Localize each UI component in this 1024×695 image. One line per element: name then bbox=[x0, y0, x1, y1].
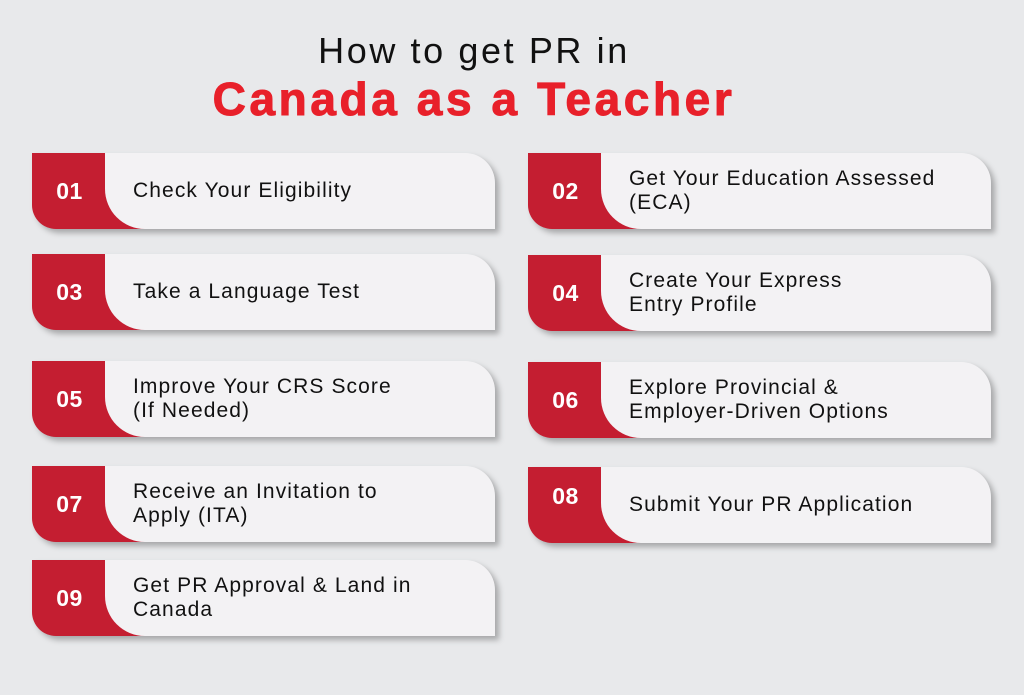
step 02 bbox=[528, 153, 998, 236]
step 08: Submit Your PR Application bbox=[629, 493, 913, 516]
step 07: Apply (ITA) bbox=[133, 504, 249, 527]
step 07 bbox=[32, 466, 502, 550]
step 02: (ECA) bbox=[629, 191, 692, 214]
step 09: 09 bbox=[56, 585, 83, 611]
step 08: 08 bbox=[552, 483, 579, 509]
step 03: Take a Language Test bbox=[133, 280, 360, 303]
step 07: 07 bbox=[56, 491, 83, 517]
step 05 bbox=[32, 361, 502, 444]
step 04: 04 bbox=[552, 280, 579, 306]
step 05: 05 bbox=[56, 386, 83, 412]
step 05: Improve Your CRS Score bbox=[133, 375, 392, 398]
step 09 bbox=[32, 560, 502, 644]
step 06: Explore Provincial & bbox=[629, 376, 839, 399]
step 04 bbox=[528, 255, 998, 338]
step 05: (If Needed) bbox=[133, 399, 250, 422]
step 01: Check Your Eligibility bbox=[133, 179, 352, 202]
subtitle: Canada as a Teacher bbox=[213, 73, 735, 125]
step 07: Receive an Invitation to bbox=[133, 480, 378, 503]
step 06 bbox=[528, 362, 998, 446]
step 08 bbox=[528, 467, 998, 550]
step 03 bbox=[32, 254, 502, 338]
step 04: Create Your Express bbox=[629, 269, 843, 292]
step 04: Entry Profile bbox=[629, 293, 758, 316]
step 02: Get Your Education Assessed bbox=[629, 167, 935, 190]
step 09: Canada bbox=[133, 598, 213, 621]
step 06: 06 bbox=[552, 387, 579, 413]
step 06: Employer-Driven Options bbox=[629, 400, 889, 423]
title: How to get PR in bbox=[318, 30, 630, 71]
step 03: 03 bbox=[56, 279, 83, 305]
step 02: 02 bbox=[552, 178, 579, 204]
step 01 bbox=[32, 153, 502, 236]
step 09: Get PR Approval & Land in bbox=[133, 574, 412, 597]
step 01: 01 bbox=[56, 178, 83, 204]
